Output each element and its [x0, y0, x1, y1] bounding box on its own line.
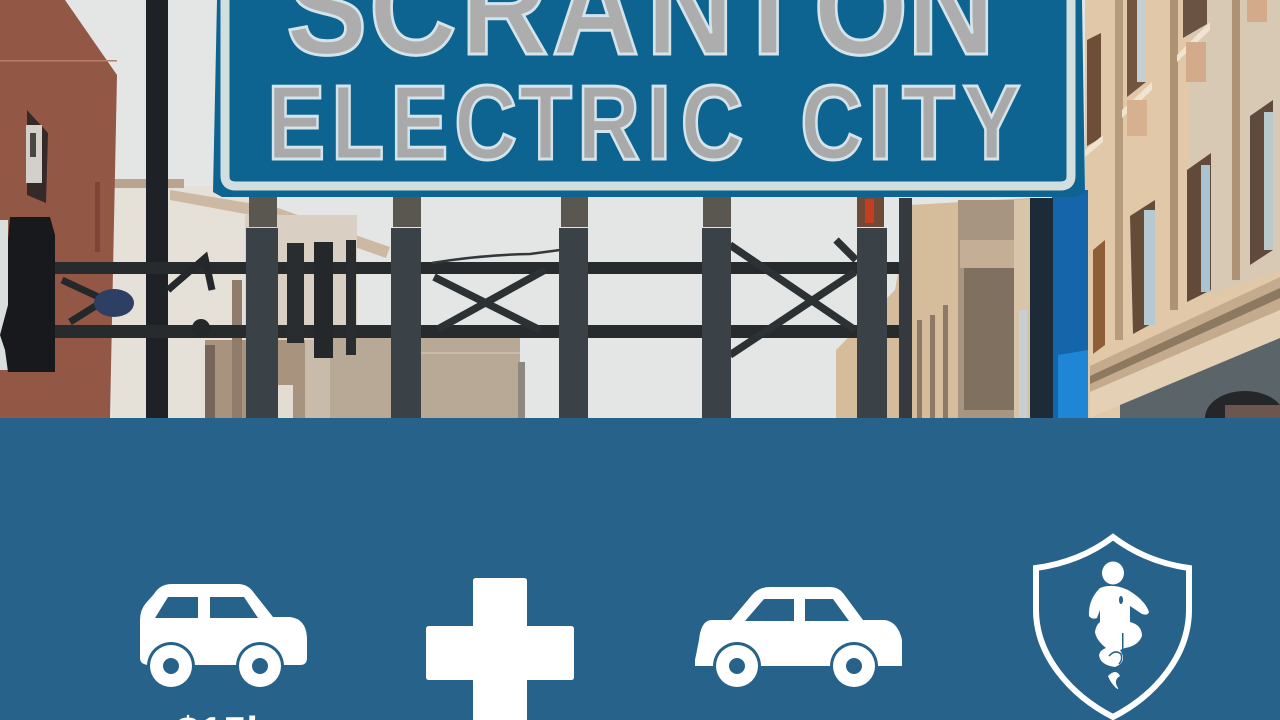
traffic signal [0, 217, 134, 372]
building: right cream facade [1085, 0, 1280, 445]
building: distant beige block [330, 338, 525, 418]
sills [1085, 0, 1267, 157]
photo: Scranton street scene [0, 0, 1280, 445]
sign frame: rails and braces [55, 240, 905, 358]
icon: hatchback car [140, 584, 307, 690]
black utility pole [146, 0, 168, 418]
icon: medical shield [1036, 537, 1189, 717]
building: left brick wall [0, 0, 117, 418]
highway sign: Scranton Electric City [213, 0, 1085, 197]
sign columns [246, 197, 912, 418]
blue sign support [1030, 190, 1088, 418]
cornice band [1090, 277, 1280, 392]
windows [1087, 0, 1273, 354]
icon: sedan car [695, 587, 902, 690]
building: cream rooftop building [112, 179, 390, 418]
building: central beige building [836, 198, 1030, 418]
panel: blue statistics band [0, 418, 1280, 720]
sign subheading: ELECTRIC CITY: ELECTRIC CITY [267, 63, 1021, 182]
icon: medical cross [426, 578, 574, 720]
